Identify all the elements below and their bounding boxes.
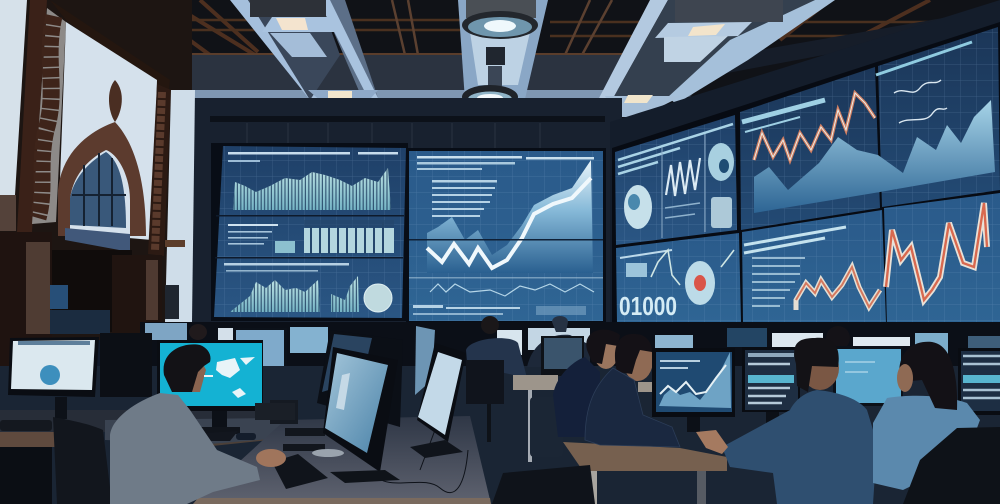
left wall — [0, 0, 195, 372]
left desk — [0, 410, 290, 504]
screen wall: left panel — [211, 143, 408, 321]
back row of monitors — [140, 322, 1000, 368]
screen C — [876, 27, 1000, 207]
ceiling ducts: left — [230, 0, 378, 113]
person: man in blue shirt — [696, 338, 877, 504]
chair: right — [903, 427, 1000, 504]
ceiling lamps — [462, 0, 538, 109]
angled monitor two — [410, 343, 466, 458]
back wall — [192, 98, 622, 338]
angled monitor one — [323, 347, 400, 483]
person: suit man at desk — [585, 334, 680, 447]
ceiling ducts: right — [598, 0, 835, 117]
person: standing man in back — [466, 316, 527, 442]
screen A — [615, 115, 737, 245]
chair: mid — [530, 397, 563, 457]
ceiling — [0, 0, 1000, 130]
on-screen digits: 01000 — [619, 291, 677, 321]
person: man in grey shirt — [110, 344, 286, 504]
far right monitor — [958, 348, 1000, 415]
screen wall: centre panel — [406, 148, 606, 324]
chart: spanning area — [754, 100, 995, 213]
ceiling ducts: centre — [458, 0, 548, 115]
data monitor — [742, 347, 800, 436]
person: far seated — [527, 316, 590, 376]
chart: middle bars — [228, 220, 394, 254]
right wall — [610, 0, 1000, 340]
chart: main area — [427, 160, 593, 273]
screen B — [740, 67, 880, 230]
right wall screens — [612, 22, 1000, 328]
floor — [0, 366, 1000, 504]
left chair — [53, 417, 112, 504]
person: suit man in profile — [553, 330, 620, 437]
left monitor — [0, 337, 99, 431]
cyan map monitor — [157, 340, 263, 441]
screen F — [884, 193, 1000, 326]
chart monitor — [652, 348, 735, 432]
chart: bottom bars — [224, 263, 359, 312]
gauge — [364, 284, 392, 312]
right desk — [563, 442, 1000, 504]
text list — [432, 180, 497, 217]
chart: spanning line — [754, 93, 875, 160]
back desk — [513, 375, 654, 462]
keyboard — [272, 454, 328, 489]
chart: bottom lines — [430, 284, 594, 296]
chart: top area bars — [228, 152, 398, 210]
dark back-of-monitor block — [100, 333, 152, 397]
centre desk — [193, 416, 491, 504]
screen E — [742, 210, 886, 323]
cyan monitor right — [833, 346, 903, 406]
centre back monitors — [255, 326, 435, 427]
chair: centre front — [492, 465, 595, 504]
person: woman — [873, 342, 980, 490]
screen D — [616, 233, 741, 322]
